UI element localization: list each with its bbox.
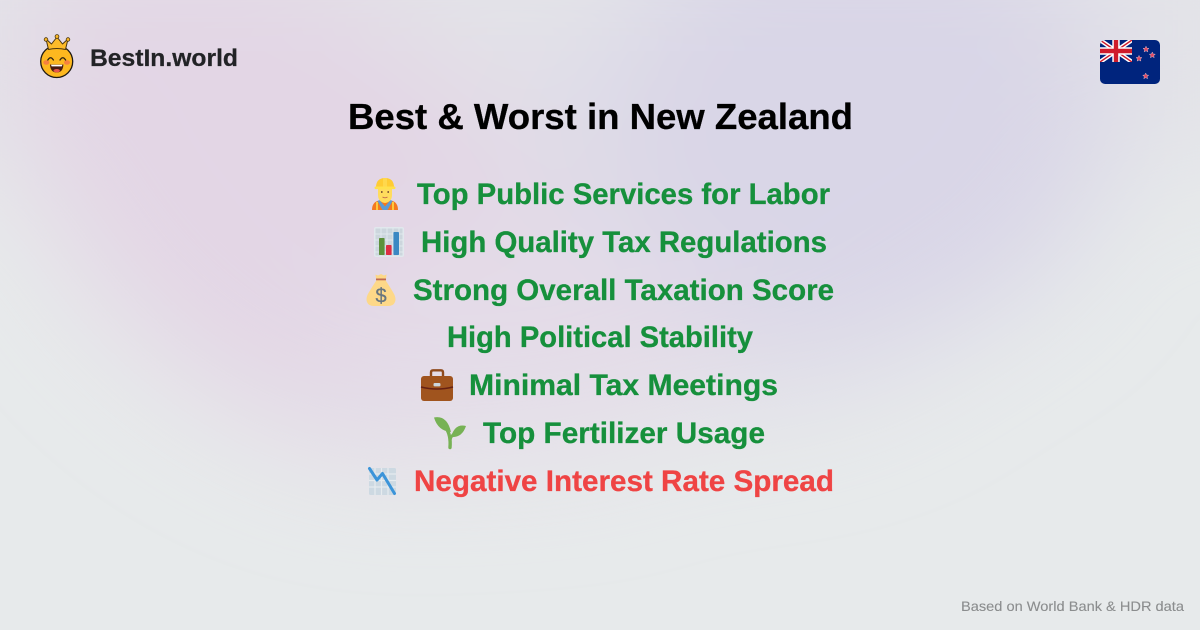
label: Minimal Tax Meetings (469, 369, 778, 402)
label: Strong Overall Taxation Score (413, 274, 834, 307)
row: tax regulations (374, 226, 827, 259)
title: Best & Worst in New Zealand (348, 96, 853, 137)
row: fertilizer usage (434, 417, 765, 450)
label: Top Fertilizer Usage (483, 417, 765, 450)
icon: seedling (434, 417, 466, 448)
logo (41, 35, 238, 78)
label: Negative Interest Rate Spread (414, 465, 834, 498)
label: Top Public Services for Labor (417, 178, 831, 211)
icon: falling chart (369, 468, 396, 495)
source note: Based on World Bank & HDR data (961, 598, 1184, 614)
row: tax meetings (421, 369, 778, 402)
list of rankings (366, 178, 834, 498)
icon: bar chart (374, 227, 404, 257)
label: High Quality Tax Regulations (421, 226, 827, 259)
icon: briefcase (421, 370, 453, 401)
icon: money bag: $ (375, 286, 387, 308)
row: taxation score (366, 274, 834, 308)
brand name: BestIn.world (90, 45, 238, 72)
icon: New Zealand flag (1100, 40, 1160, 84)
icon: crowned smiling face (41, 35, 73, 78)
row: public services (372, 178, 831, 211)
row: interest rate spread (369, 465, 834, 498)
row: political stability label: High Political Stability (447, 321, 754, 354)
icon: construction worker (372, 178, 398, 210)
icon: money bag (366, 274, 396, 308)
